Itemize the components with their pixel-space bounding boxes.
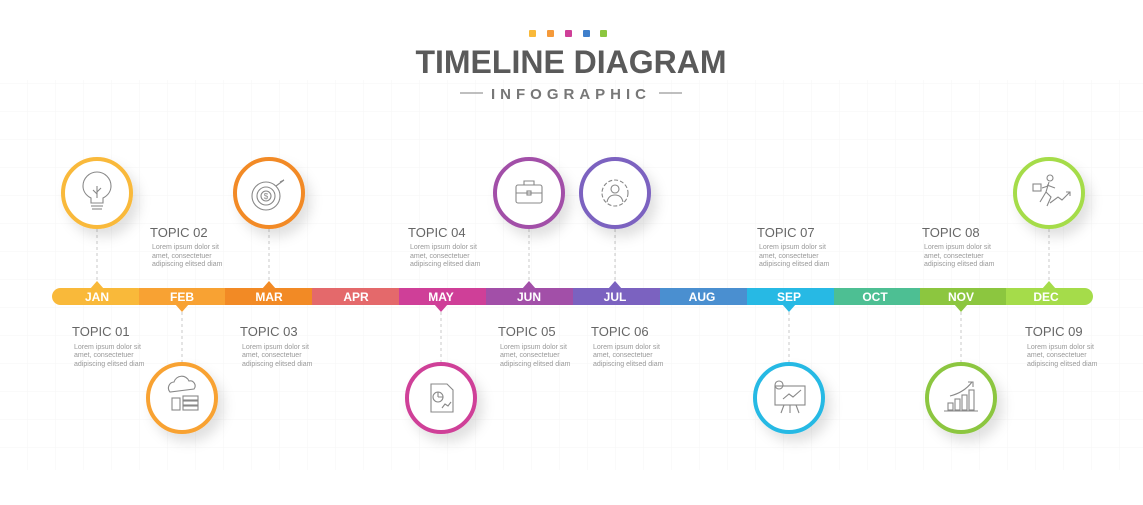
circles <box>63 159 1083 432</box>
topic 09 <box>1025 324 1098 368</box>
icon: bar chart <box>944 382 978 411</box>
topic 08: TOPIC 08 <box>922 225 980 240</box>
topic 05: amet, consectetuer <box>500 352 560 359</box>
topic 07: amet, consectetuer <box>759 253 819 260</box>
timeline bar: JAN <box>85 290 109 304</box>
topic 08: adipiscing elitsed diam <box>924 261 995 268</box>
icon: dollar target: $ <box>264 192 269 201</box>
timeline bar: DEC <box>1033 290 1059 304</box>
topic 06: amet, consectetuer <box>593 352 653 359</box>
topic texts <box>72 225 1098 368</box>
topic 09: TOPIC 09 <box>1025 324 1083 339</box>
timeline bar: NOV <box>948 290 974 304</box>
timeline bar: OCT <box>862 290 888 304</box>
topic 02 <box>150 225 223 268</box>
topic 09: adipiscing elitsed diam <box>1027 361 1098 368</box>
topic 05: Lorem ipsum dolor sit <box>500 344 567 351</box>
topic 01 <box>72 324 145 368</box>
topic 03: TOPIC 03 <box>240 324 298 339</box>
topic 02: adipiscing elitsed diam <box>152 261 223 268</box>
subtitle: INFOGRAPHIC <box>491 86 651 103</box>
pointers <box>90 281 104 289</box>
topic 01: adipiscing elitsed diam <box>74 361 145 368</box>
topic 04: TOPIC 04 <box>408 225 466 240</box>
topic 06: adipiscing elitsed diam <box>593 361 664 368</box>
topic 07: adipiscing elitsed diam <box>759 261 830 268</box>
topic 07 <box>757 225 830 268</box>
topic 04: amet, consectetuer <box>410 253 470 260</box>
topic 03: amet, consectetuer <box>242 352 302 359</box>
timeline bar: APR <box>343 290 369 304</box>
icon: runner <box>1033 175 1070 206</box>
timeline bar: SEP <box>777 290 801 304</box>
timeline bar: AUG <box>689 290 715 304</box>
timeline bar <box>52 281 1093 312</box>
topic 07: TOPIC 07 <box>757 225 815 240</box>
icon: dollar target <box>252 180 284 210</box>
timeline bar: MAR <box>255 290 283 304</box>
icon: bulb <box>83 172 111 209</box>
icon: gear person <box>602 180 628 206</box>
topic 03: adipiscing elitsed diam <box>242 361 313 368</box>
topic 06: TOPIC 06 <box>591 324 649 339</box>
topic 05: TOPIC 05 <box>498 324 556 339</box>
topic 09: amet, consectetuer <box>1027 352 1087 359</box>
topic 03 <box>240 324 313 368</box>
dashed connectors <box>97 229 1049 362</box>
topic 01: TOPIC 01 <box>72 324 130 339</box>
topic 06 <box>591 324 664 368</box>
topic 06: Lorem ipsum dolor sit <box>593 344 660 351</box>
timeline bar: JUL <box>604 290 626 304</box>
topic 02: Lorem ipsum dolor sit <box>152 244 219 251</box>
topic 03: Lorem ipsum dolor sit <box>242 344 309 351</box>
timeline bar: MAY <box>428 290 454 304</box>
title: TIMELINE DIAGRAM <box>415 44 727 80</box>
topic 05 <box>498 324 571 368</box>
topic 09: Lorem ipsum dolor sit <box>1027 344 1094 351</box>
icon: cloud server <box>168 376 198 410</box>
icon: briefcase <box>516 181 542 203</box>
icons <box>83 172 1070 413</box>
topic 08 <box>922 225 995 268</box>
topic 08: Lorem ipsum dolor sit <box>924 244 991 251</box>
topic 05: adipiscing elitsed diam <box>500 361 571 368</box>
timeline bar: FEB <box>170 290 194 304</box>
topic 02: TOPIC 02 <box>150 225 208 240</box>
topic 04: Lorem ipsum dolor sit <box>410 244 477 251</box>
topic 04 <box>408 225 481 268</box>
timeline bar: JUN <box>517 290 541 304</box>
topic 01: amet, consectetuer <box>74 352 134 359</box>
icon: pie doc <box>431 384 453 412</box>
topic 08: amet, consectetuer <box>924 253 984 260</box>
icon: presentation <box>775 381 805 413</box>
topic 02: amet, consectetuer <box>152 253 212 260</box>
topic 04: adipiscing elitsed diam <box>410 261 481 268</box>
topic 07: Lorem ipsum dolor sit <box>759 244 826 251</box>
topic 01: Lorem ipsum dolor sit <box>74 344 141 351</box>
